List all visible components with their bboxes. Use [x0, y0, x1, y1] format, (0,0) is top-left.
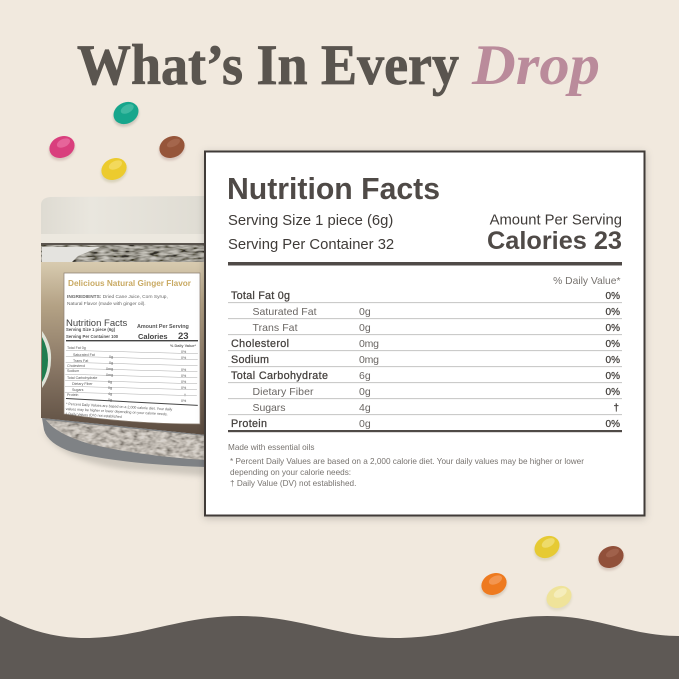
jar label nutrition facts: Protein: [67, 393, 78, 397]
candy: pink: [44, 132, 79, 165]
green badge: [42, 331, 51, 388]
nutrient table: [228, 290, 622, 432]
bottom wave: [0, 616, 679, 679]
jar label nutrition facts: 0g: [109, 361, 113, 365]
jar label nutrition facts: Total Carbohydrate: [67, 376, 97, 380]
jar label nutrition facts: 0mg: [106, 367, 113, 371]
footnotes: depending on your calorie needs:: [230, 468, 351, 477]
jar label nutrition facts: Serving Size 1 piece (6g): [66, 327, 116, 332]
nutrient table: Total Carbohydrate: [231, 370, 328, 382]
jar white label: [64, 273, 200, 424]
candy: teal: [108, 98, 144, 131]
jar label ingredients: [67, 294, 168, 307]
jar label nutrition facts: 0%: [181, 380, 187, 384]
nutrient table: 0%: [606, 339, 620, 350]
nutrient table: 0%: [606, 371, 620, 382]
jar label nutrition facts: % Daily Value*: [170, 344, 197, 348]
nutrient table: 0%: [606, 307, 620, 318]
jar label nutrition facts: 4g: [108, 392, 112, 396]
jar brown label: [41, 262, 206, 435]
jar label nutrition facts: Sugars: [72, 388, 84, 392]
nutrient table: 0%: [606, 323, 620, 334]
jar label nutrition facts: 6g: [108, 380, 112, 384]
jar label nutrition facts: Saturated Fat: [73, 353, 95, 357]
jar label nutrition facts: values may be higher or lower depending on your calorie needs.: [66, 407, 168, 416]
nutrient table: Saturated Fat: [252, 306, 317, 318]
daily value header: % Daily Value*: [553, 276, 620, 287]
nutrient table: Protein: [231, 418, 267, 430]
nutrient table: 0mg: [359, 338, 379, 350]
nutrient table: 0mg: [359, 354, 379, 366]
jar label nutrition facts: Cholesterol: [67, 364, 85, 368]
jar label nutrition facts: 0%: [181, 399, 187, 403]
nutrient table: 0%: [606, 291, 620, 302]
nutrient table: 6g: [359, 370, 371, 382]
nutrient table: Cholesterol: [231, 338, 289, 350]
jar label heading: Delicious Natural Ginger Flavor: [68, 279, 191, 288]
jar label nutrition facts: 0g: [108, 386, 112, 390]
footnote: essential oils: Made with essential oils: [228, 443, 314, 452]
jar label nutrition facts: 0%: [181, 350, 187, 354]
jar label nutrition facts: Serving Per Container 100: [66, 334, 119, 339]
nutrient table: 0g: [359, 386, 371, 398]
jar label nutrition facts: * Percent Daily Values are based on a 2,000 calorie diet. Your daily: [66, 402, 173, 412]
candy: brown lower: [593, 542, 628, 575]
jar label nutrition facts: 0mg: [106, 373, 113, 377]
jar label nutrition facts: Dietary Fiber: [72, 382, 93, 386]
nutrient table: Sodium: [231, 354, 269, 366]
nutrient table: Trans Fat: [252, 322, 298, 334]
nutrient table: †: [613, 403, 619, 414]
jar shadow: [42, 430, 205, 476]
jar lid: [41, 196, 206, 234]
jar label ingredients: Natural Flavor (made with ginger oil).: [67, 301, 146, 307]
footnotes: [230, 457, 584, 488]
jar label nutrition facts: 23: [178, 331, 189, 342]
servings per container: Serving Per Container 32: [228, 237, 394, 253]
jar label nutrition facts: [65, 318, 198, 422]
nutrient table: 4g: [359, 402, 371, 414]
panel box: [205, 152, 644, 516]
candy: yellow lower: [529, 532, 565, 565]
jar label nutrition facts: 0%: [181, 386, 187, 390]
jar label nutrition facts: 0g: [108, 398, 112, 402]
jar label nutrition facts: 0%: [181, 374, 187, 378]
jar label nutrition facts: 0g: [109, 355, 113, 359]
panel: nutrition facts: [205, 152, 644, 516]
jar label nutrition facts: Calories: [138, 332, 168, 341]
jar label nutrition facts: Sodium: [67, 369, 79, 373]
serving size: Serving Size 1 piece (6g): [228, 213, 393, 229]
jar label nutrition facts: Trans Fat: [73, 359, 88, 363]
nutrient table: Dietary Fiber: [252, 386, 314, 398]
nutrient table: 0g: [359, 306, 371, 318]
nutrient table: 0g: [359, 322, 371, 334]
nutrient table: 0%: [606, 355, 620, 366]
nutrient table: 0g: [359, 418, 371, 430]
thick rule: [228, 262, 622, 266]
nutrient table: 0%: [606, 387, 620, 398]
jar label nutrition facts: †: [184, 393, 186, 397]
title: What’s In Every: [77, 34, 459, 97]
candy: yellow: [96, 154, 131, 187]
footnotes: * Percent Daily Values are based on a 2,000 calorie diet. Your daily values may be higher or lower: [230, 457, 584, 466]
title accent: Drop: Drop: [471, 34, 600, 97]
jar label nutrition facts: Nutrition Facts: [66, 318, 127, 329]
nutrient table: 0%: [606, 419, 620, 430]
jar label nutrition facts: Amount Per Serving: [137, 324, 189, 330]
candy: brown: [154, 132, 189, 165]
jar: [41, 196, 206, 476]
candy: pale yellow lower: [541, 582, 577, 615]
jar label ingredients: INGREDIENTS: Dried Cane Juice, Corn Syrup,: [67, 294, 168, 300]
jar label nutrition facts: † Daily Values (DV) not established: [65, 412, 122, 419]
jar neck with candy: [41, 243, 206, 262]
jar label nutrition facts: Total Fat 0g: [67, 346, 86, 350]
jar glass base: [42, 418, 206, 467]
nutrient table: Sugars: [252, 402, 286, 414]
footnotes: † Daily Value (DV) not established.: [230, 479, 356, 488]
calories: Calories 23: [487, 227, 622, 255]
jar label nutrition facts: 0%: [181, 368, 187, 372]
jar label nutrition facts: 0%: [181, 356, 187, 360]
amount per serving: Amount Per Serving: [490, 212, 622, 228]
candy: orange lower: [476, 569, 511, 602]
nutrient table: Total Fat 0g: [231, 290, 290, 302]
heading: Nutrition Facts: [227, 173, 440, 206]
